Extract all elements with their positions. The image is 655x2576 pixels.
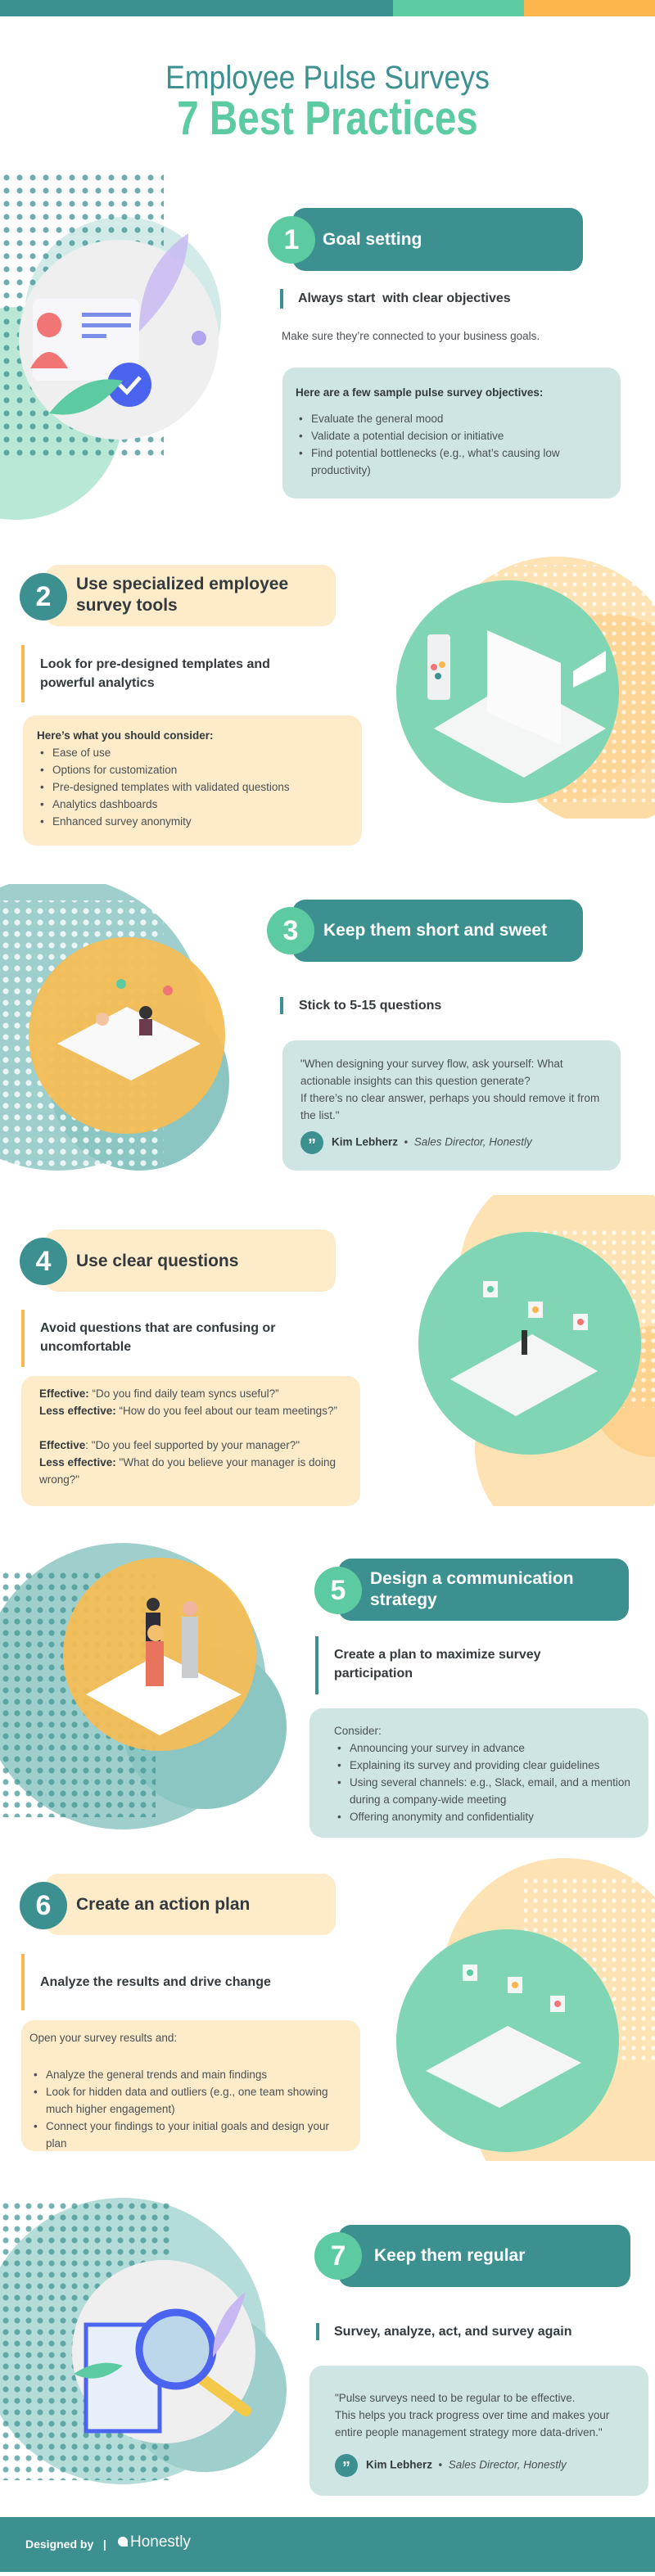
box 6: Connect your findings to your initial goals and design your plan — [46, 2120, 329, 2150]
box 2: Here’s what you should consider: — [37, 729, 214, 742]
number 2: 2 — [36, 581, 51, 612]
title: 7 Best Practices — [177, 92, 478, 145]
sub 6: Analyze the results and drive change — [40, 1975, 271, 1989]
section 2 header — [45, 565, 336, 626]
section 7 header: Keep them regular — [374, 2246, 525, 2265]
section 1 header: Goal setting — [323, 230, 422, 249]
number 1 — [268, 216, 315, 264]
sub 2 — [21, 645, 270, 702]
illustration 6: office — [396, 1858, 655, 2161]
section 5 header: strategy — [370, 1590, 437, 1609]
box 5: Using several channels: e.g., Slack, email, and a mention during a company-wide meeting — [350, 1776, 630, 1806]
section 4 header — [45, 1229, 336, 1292]
number 5 — [314, 1567, 362, 1614]
sub 2: Look for pre-designed templates and — [40, 657, 270, 671]
box 5: Consider: — [334, 1725, 382, 1737]
quote box 7: "Pulse surveys need to be regular to be effective. — [335, 2392, 575, 2404]
quote box 3: Kim Lebherz • Sales Director, Honestly — [332, 1136, 532, 1148]
box 4: Effective: “Do you find daily team syncs useful?” — [39, 1387, 279, 1400]
sub 4: Avoid questions that are confusing or — [40, 1321, 275, 1335]
box 1 — [282, 368, 621, 499]
box 5: Offering anonymity and confidentiality — [350, 1811, 534, 1823]
section 6 header: Create an action plan — [76, 1895, 250, 1914]
number 6: 6 — [36, 1890, 51, 1921]
box 6: Analyze the general trends and main findings — [46, 2068, 267, 2081]
box 5 — [309, 1708, 648, 1838]
number 7: 7 — [331, 2240, 346, 2271]
box 2: Pre-designed templates with validated questions — [52, 781, 290, 793]
section 1 header — [292, 208, 583, 271]
section 5 header — [338, 1559, 629, 1621]
number 4: 4 — [36, 1246, 51, 1277]
box 1: Find potential bottlenecks (e.g., what’s causing low productivity) — [311, 447, 560, 476]
number 6 — [20, 1882, 67, 1929]
sub 1 — [280, 289, 511, 309]
title — [165, 60, 490, 145]
section 2 header: survey tools — [76, 596, 178, 615]
quote box 7: This helps you track progress over time and makes your entire people management strategy more data-driven." — [335, 2409, 609, 2438]
box 2 — [23, 715, 362, 846]
body 1: Make sure they’re connected to your business goals. — [282, 330, 540, 342]
quote box 3: If there’s no clear answer, perhaps you should remove it from the list." — [300, 1092, 599, 1121]
box 6: Open your survey results and: — [29, 2032, 177, 2044]
sub 5 — [315, 1636, 541, 1694]
number 2 — [20, 573, 67, 620]
quote box 3: "When designing your survey flow, ask yourself: What actionable insights can this question generate? — [300, 1058, 563, 1087]
sub 6 — [21, 1954, 271, 2010]
section 3 header: Keep them short and sweet — [323, 921, 547, 940]
title: Employee Pulse Surveys — [165, 60, 490, 96]
section 2 header: Use specialized employee — [76, 575, 288, 593]
sub 7: Survey, analyze, act, and survey again — [334, 2325, 572, 2339]
box 1: Validate a potential decision or initiative — [311, 430, 504, 442]
sub 4: uncomfortable — [40, 1340, 131, 1354]
footer — [0, 2517, 655, 2572]
box 6 — [21, 2020, 360, 2151]
illustration 2: laptop — [396, 557, 655, 819]
quote box 7: Kim Lebherz • Sales Director, Honestly — [366, 2459, 567, 2471]
illustration 5: people — [0, 1543, 287, 1829]
top color bar — [0, 0, 655, 16]
box 2: Ease of use — [52, 747, 111, 759]
box 2: Options for customization — [52, 764, 177, 776]
section 5 header: Design a communication — [370, 1569, 574, 1588]
section 3 header — [292, 900, 583, 962]
sub 1: Always start with clear objectives — [298, 291, 511, 305]
sub 5: participation — [334, 1667, 413, 1680]
footer: Designed by | — [25, 2538, 106, 2551]
section 7 header — [338, 2225, 630, 2287]
illustration 1: goal setting — [0, 175, 221, 520]
quote box 7 — [309, 2366, 648, 2496]
number 3: 3 — [283, 915, 298, 946]
logo: Honestly: Honestly — [130, 2533, 191, 2551]
section 4 header: Use clear questions — [76, 1252, 238, 1270]
box 1: Here are a few sample pulse survey objectives: — [296, 386, 543, 399]
box 2: Analytics dashboards — [52, 798, 157, 810]
section 6 header — [45, 1874, 336, 1935]
box 5: Explaining its survey and providing clear guidelines — [350, 1759, 599, 1771]
box 2: Enhanced survey anonymity — [52, 815, 192, 828]
box 4: Less effective: “How do you feel about our team meetings?” — [39, 1405, 337, 1417]
number 1: 1 — [284, 224, 299, 255]
illustration 4: office — [418, 1195, 655, 1506]
box 6: Look for hidden data and outliers (e.g., one team showing much higher engagement) — [46, 2086, 328, 2115]
box 5: Announcing your survey in advance — [350, 1742, 525, 1754]
illustration 7: magnifier — [0, 2198, 287, 2484]
number 7 — [314, 2232, 362, 2280]
quote box 3 — [282, 1040, 621, 1171]
box 1: Evaluate the general mood — [311, 413, 443, 425]
sub 3: Stick to 5-15 questions — [299, 999, 441, 1013]
box 4: Less effective: "What do you believe your manager is doing wrong?" — [39, 1456, 336, 1486]
quote box 7: ” — [342, 2459, 350, 2477]
illustration 3: desks — [0, 884, 229, 1171]
box 4: Effective: "Do you feel supported by your manager?" — [39, 1439, 300, 1451]
number 3 — [267, 907, 314, 954]
sub 5: Create a plan to maximize survey — [334, 1648, 541, 1662]
sub 2: powerful analytics — [40, 676, 155, 690]
box 4 — [21, 1376, 360, 1506]
number 4 — [20, 1238, 67, 1285]
number 5: 5 — [331, 1575, 346, 1606]
sub 4 — [21, 1310, 275, 1367]
quote box 3: ” — [308, 1136, 316, 1154]
